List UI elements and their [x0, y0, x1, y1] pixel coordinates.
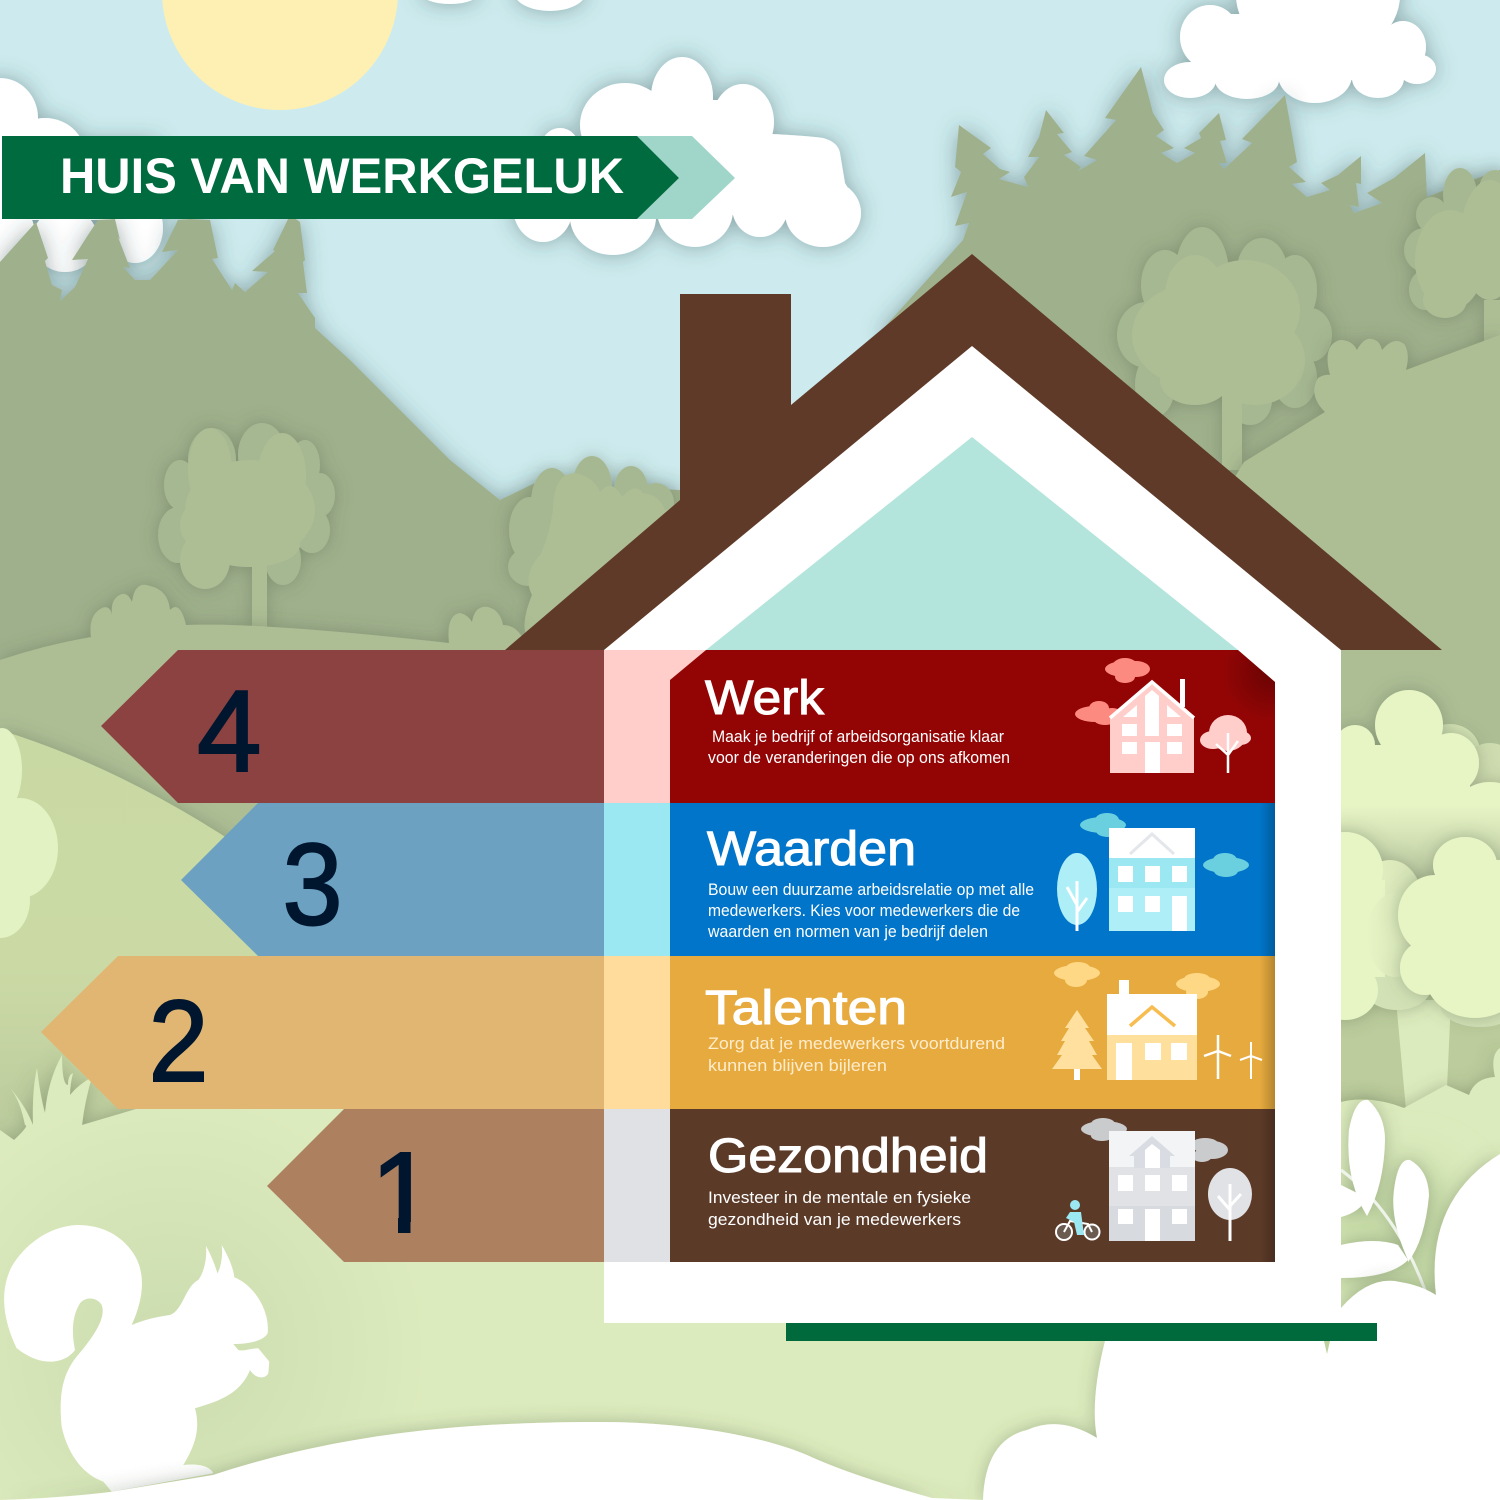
clouds: [0, 0, 1436, 272]
sun: [162, 0, 398, 110]
arrow 2: [41, 956, 604, 1109]
leaf 4: [1341, 1241, 1408, 1278]
light connector strips: [604, 650, 706, 1262]
arrow 3: [181, 803, 604, 956]
right dark gaps under bushes: [1341, 980, 1500, 1140]
text block: Zorg dat je medewerkers voortdurend: [708, 1034, 1005, 1053]
hill right: [1100, 335, 1500, 1150]
leaf 3: [1341, 1185, 1367, 1217]
cloud: middle: [513, 57, 861, 255]
text block: [708, 727, 1010, 767]
front low hill: [0, 585, 522, 900]
ground shade near plant: [1325, 1160, 1475, 1330]
icon: pink house with clouds and tree: [1075, 658, 1251, 773]
arrow 4: [101, 650, 604, 803]
green base bar: [786, 1323, 1377, 1341]
panel: Werk: [670, 650, 1275, 803]
tree: right edge: [1404, 168, 1500, 350]
back forest right: [880, 67, 1500, 600]
cloud: left: [0, 78, 163, 272]
heading: Talenten: [705, 982, 907, 1035]
cloud: top small: [420, 0, 586, 11]
heading: Werk: [705, 672, 825, 725]
text block: Bouw een duurzame arbeidsrelatie op met alle: [708, 880, 1034, 899]
title: HUIS VAN WERKGELUK: [60, 148, 624, 204]
house roof and chimney: [505, 254, 1442, 650]
bush: far left: [0, 728, 58, 938]
leaf 2: [1393, 1160, 1429, 1262]
arrow 1: 1: [370, 1128, 435, 1258]
tree trunks right: [1396, 1000, 1451, 1110]
text block: Investeer in de mentale en fysieke: [708, 1188, 971, 1207]
bush: top: [1335, 690, 1500, 880]
house walls: [604, 346, 1341, 1323]
text block: [708, 1188, 971, 1229]
arrow 3: 3: [282, 820, 342, 950]
heading: Gezondheid: [708, 1130, 988, 1183]
text block: [708, 1034, 1005, 1075]
text block: kunnen blijven bijleren: [708, 1056, 887, 1075]
icon: yellow house with clouds, tree and windmills: [1052, 962, 1262, 1080]
text block: gezondheid van je medewerkers: [708, 1210, 961, 1229]
bushes right: [1307, 690, 1500, 1027]
left forest hill: [0, 215, 680, 660]
plant: white leaves: [1341, 1100, 1429, 1290]
title banner: [2, 136, 735, 219]
arrow 4: 4: [197, 666, 262, 796]
icon: grey house with clouds, tree and cyclist: [1056, 1118, 1252, 1241]
leaf 1: [1348, 1100, 1385, 1216]
bush: left hill: [508, 456, 680, 640]
foreground ground: [0, 1048, 1500, 1500]
tree: right behind house: [1117, 227, 1332, 470]
text block: medewerkers. Kies voor medewerkers die de: [708, 901, 1020, 920]
panel: Gezondheid: [670, 1109, 1275, 1262]
text block: voor de veranderingen die op ons afkomen: [708, 748, 1010, 767]
cloud: top right: [1164, 0, 1436, 103]
panel: Talenten: [670, 956, 1275, 1109]
text block: Maak je bedrijf of arbeidsorganisatie klaar: [712, 727, 1004, 746]
tree: left hill: [158, 423, 335, 630]
heading: Waarden: [707, 823, 916, 876]
squirrel: [4, 1225, 269, 1492]
white ground foreground: [0, 1154, 1500, 1500]
text block: [707, 880, 1034, 941]
gable window: [706, 437, 1238, 650]
arrow 2: 2: [148, 976, 208, 1106]
light hill left: [0, 730, 300, 1160]
icon: blue house with clouds and tree: [1057, 813, 1249, 931]
arrow 1: [267, 1109, 604, 1262]
text block: waarden en normen van je bedrijf delen: [707, 922, 988, 941]
panel: Waarden: [670, 803, 1275, 956]
bush: top back lobes: [1420, 724, 1480, 780]
bush: lower left: [1307, 832, 1432, 1020]
bush: lower right: [1440, 983, 1500, 1027]
